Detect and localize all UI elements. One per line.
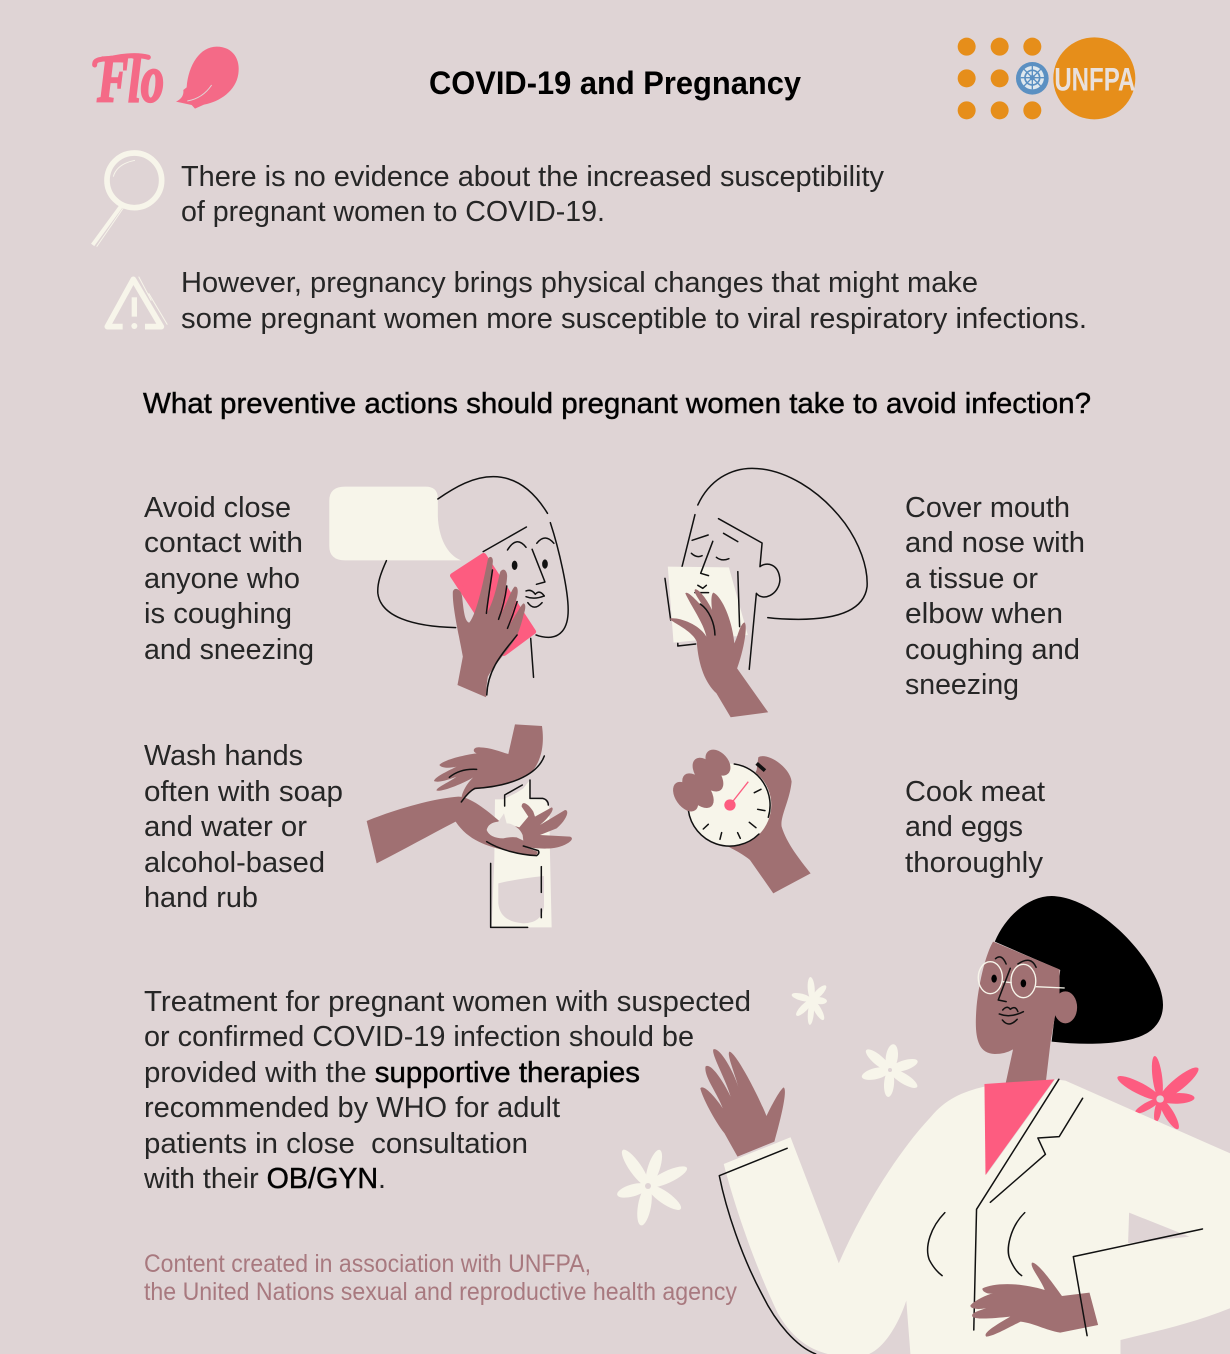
footer credit: the United Nations sexual and reproductive health agency — [144, 1278, 737, 1306]
illustration: doctor — [700, 896, 1230, 1354]
text: wash hands: hand rub — [144, 882, 258, 914]
footer credit — [144, 1250, 737, 1306]
text: wash hands: often with soap — [144, 776, 343, 808]
hand — [720, 756, 811, 893]
orange dots — [958, 38, 1041, 119]
text: cover mouth: coughing and — [905, 634, 1080, 666]
text: physical changes: However, pregnancy brings physical changes that might make — [181, 267, 978, 299]
bottle — [492, 780, 552, 927]
text: avoid close contact: contact with — [144, 527, 303, 559]
text: physical changes: some pregnant women more susceptible to viral respiratory infections. — [181, 303, 1087, 335]
foam — [487, 813, 523, 841]
icon: UN emblem — [1016, 62, 1049, 95]
lower arm — [367, 797, 572, 863]
text: cook meat — [905, 776, 1045, 879]
text: treatment: with their OB/GYN. — [143, 1163, 386, 1195]
text: cover mouth: elbow when — [905, 598, 1063, 630]
swash of the F — [95, 56, 148, 65]
orange circle — [1053, 37, 1135, 119]
pink top — [984, 1079, 1054, 1175]
bottle lines — [491, 780, 548, 927]
text: avoid close contact: is coughing — [144, 598, 292, 630]
text: cover mouth — [905, 492, 1085, 701]
timer dial — [689, 764, 771, 846]
hair and face lines — [378, 477, 568, 677]
arm line — [1073, 1229, 1202, 1336]
flower: top — [791, 977, 828, 1025]
illustration: woman on phone — [329, 477, 568, 697]
text: wash hands — [144, 740, 343, 914]
white coat — [724, 1079, 1230, 1354]
text: no evidence: There is no evidence about the increased susceptibility — [181, 161, 884, 193]
text: treatment: recommended by WHO for adult — [144, 1092, 560, 1124]
timer crown — [757, 763, 765, 771]
hand on hip — [970, 1263, 1098, 1337]
icon: magnifying glass — [93, 153, 162, 247]
text: avoid close contact: Avoid close — [144, 492, 291, 524]
illustration: hand with timer — [668, 745, 811, 893]
hand — [453, 557, 525, 697]
bottle liquid — [498, 876, 544, 923]
hair — [995, 896, 1163, 1044]
phone — [453, 556, 533, 653]
gap at waist — [1128, 1213, 1189, 1243]
text: cover mouth: sneezing — [905, 669, 1019, 701]
wordmark: Flo: Flo — [97, 43, 164, 116]
text: avoid close contact — [144, 492, 314, 666]
icon: feather — [176, 47, 239, 109]
text: avoid close contact: and sneezing — [144, 634, 314, 666]
hair and face lines — [679, 468, 867, 669]
text: no evidence — [181, 161, 884, 228]
icon: warning triangle — [107, 277, 167, 329]
text: cook meat: Cook meat — [905, 776, 1045, 808]
flower: middle — [861, 1043, 920, 1097]
pink flower — [1115, 1055, 1202, 1131]
footer credit: Content created in association with UNFPA, — [144, 1250, 591, 1278]
text: treatment: or confirmed COVID-19 infection should be — [144, 1021, 694, 1053]
heading: preventive actions: What preventive actions should pregnant women take to avoid infection? — [143, 388, 1091, 420]
logo: Flo — [95, 43, 239, 116]
wordmark: UNFPA: UNFPA — [1054, 61, 1135, 97]
ear — [1054, 991, 1077, 1023]
coat lines — [719, 1079, 1083, 1354]
text: treatment: provided with the supportive therapies — [144, 1057, 640, 1089]
text: wash hands: Wash hands — [144, 740, 303, 772]
text: cover mouth: and nose with — [905, 527, 1085, 559]
logo: UNFPA — [958, 37, 1135, 119]
illustration: woman with tissue — [665, 468, 867, 717]
text: wash hands: alcohol-based — [144, 847, 325, 879]
speech bubble — [329, 487, 461, 560]
text: physical changes — [181, 267, 1087, 335]
timer needle — [730, 782, 748, 805]
hand — [669, 589, 768, 717]
text: no evidence: of pregnant women to COVID-19. — [181, 196, 605, 228]
text: cook meat: thoroughly — [905, 847, 1043, 879]
text: cook meat: and eggs — [905, 811, 1023, 843]
text: treatment: patients in close consultation — [144, 1128, 528, 1160]
text: treatment: Treatment for pregnant women with suspected — [144, 986, 751, 1018]
tissue — [668, 567, 748, 643]
text: avoid close contact: anyone who — [144, 563, 300, 595]
flower: bottom — [616, 1147, 690, 1227]
text: treatment — [143, 986, 751, 1195]
upper hand — [434, 724, 543, 802]
glasses — [978, 962, 1065, 998]
title: COVID-19 and Pregnancy — [429, 65, 801, 101]
fingers — [668, 745, 735, 816]
facial features — [991, 957, 1036, 1024]
text: cover mouth: Cover mouth — [905, 492, 1070, 524]
illustration: washing hands — [367, 724, 572, 927]
text: cover mouth: a tissue or — [905, 563, 1038, 595]
raised hand — [700, 1049, 785, 1157]
text: wash hands: and water or — [144, 811, 307, 843]
face and neck — [976, 942, 1060, 1083]
